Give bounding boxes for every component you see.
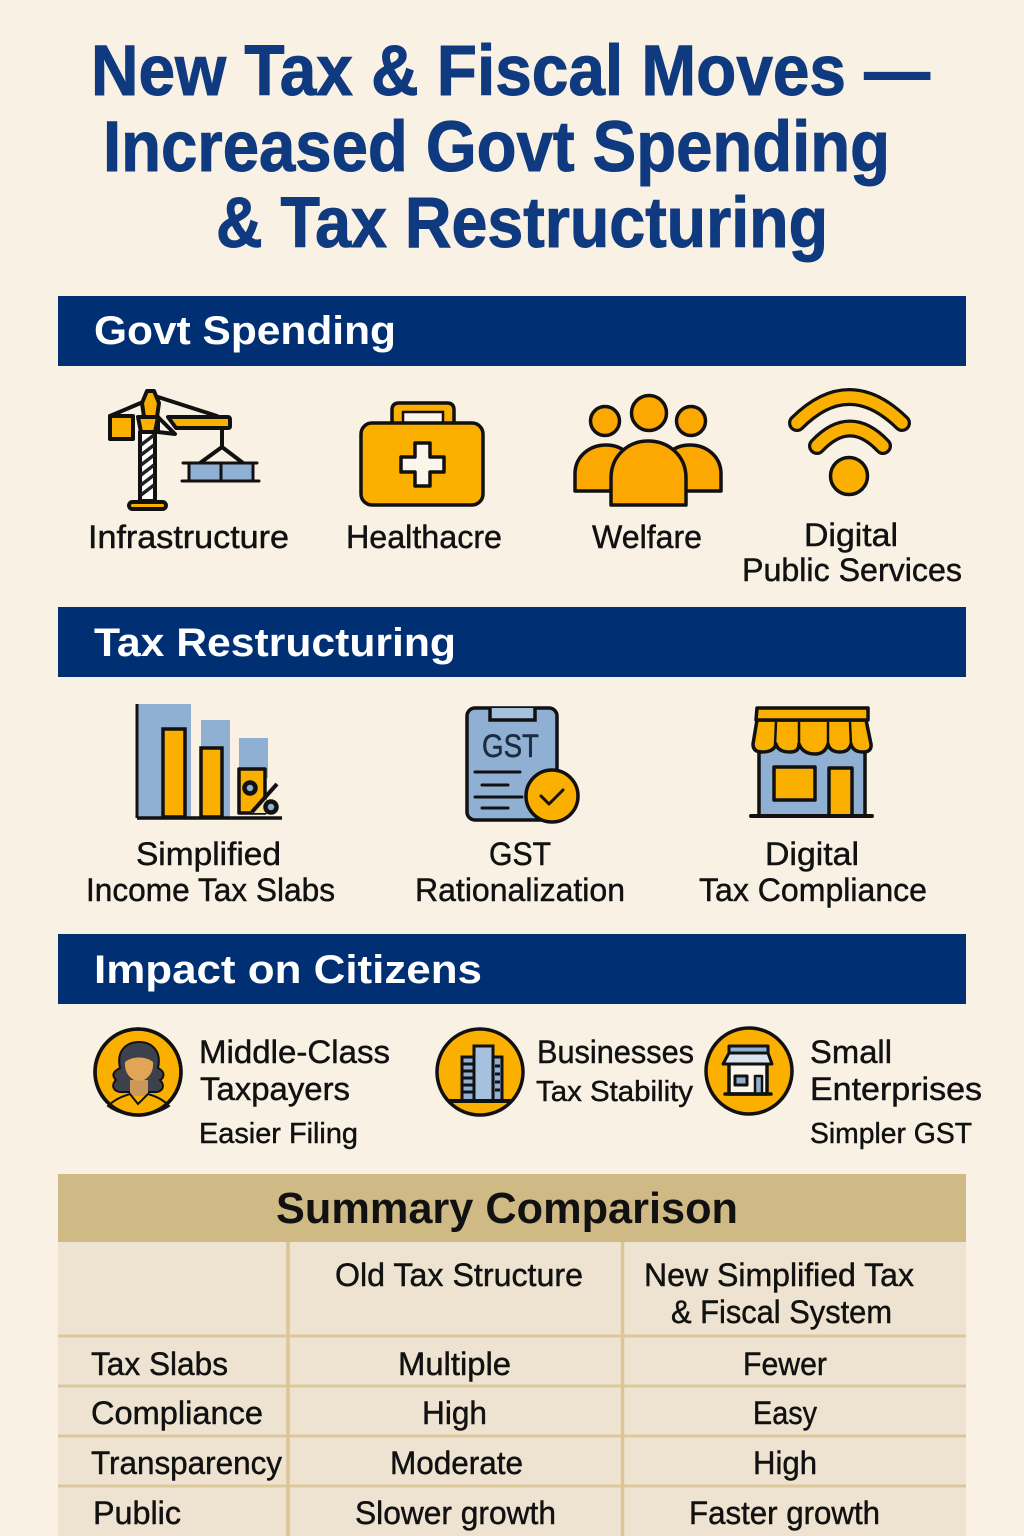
label: Small Enterprises Simpler GST bbox=[810, 1034, 982, 1150]
table header row: & Fiscal System bbox=[671, 1294, 892, 1330]
label: Businesses Tax Stability bbox=[536, 1034, 694, 1108]
table header row: New Simplified Tax bbox=[644, 1257, 914, 1293]
row: Transparency: Transparency bbox=[91, 1445, 282, 1481]
label: Small Enterprises Simpler GST: Enterprises bbox=[810, 1071, 982, 1107]
section heading: Tax Restructuring bbox=[58, 607, 966, 677]
row: Public bbox=[93, 1495, 880, 1531]
section heading: Govt Spending: Govt Spending bbox=[94, 309, 396, 353]
label: Small Enterprises Simpler GST: Small bbox=[810, 1034, 892, 1070]
section heading: Govt Spending bbox=[58, 296, 966, 366]
row: Tax Slabs: Multiple bbox=[398, 1346, 511, 1382]
row: Tax Slabs bbox=[91, 1346, 827, 1382]
row: Compliance: Compliance bbox=[91, 1395, 263, 1431]
label: Simplified Income Tax Slabs bbox=[86, 836, 335, 908]
section heading: Impact on Citizens: Impact on Citizens bbox=[94, 948, 482, 992]
label: Healthacre: Healthacre bbox=[346, 519, 502, 555]
icon: construction crane bbox=[110, 391, 259, 509]
icon: small enterprise shop bbox=[706, 1028, 792, 1114]
label: Digital Tax Compliance: Digital bbox=[765, 836, 859, 872]
label: Digital Public Services: Digital bbox=[804, 517, 898, 553]
label: GST Rationalization bbox=[415, 836, 625, 908]
label: Welfare: Welfare bbox=[592, 519, 702, 555]
label: Businesses Tax Stability: Businesses bbox=[537, 1034, 694, 1070]
row: Compliance: High bbox=[422, 1395, 487, 1431]
title: & Tax Restructuring bbox=[216, 184, 828, 263]
row: Tax Slabs: Tax Slabs bbox=[91, 1346, 228, 1382]
label: GST Rationalization: Rationalization bbox=[415, 872, 625, 908]
label: Digital Public Services: Public Services bbox=[742, 552, 962, 588]
label: Infrastructure: Infrastructure bbox=[88, 519, 289, 555]
row: Compliance: Easy bbox=[753, 1395, 817, 1431]
label: Digital Tax Compliance bbox=[699, 836, 927, 908]
icon: office building bbox=[437, 1029, 523, 1115]
label: Digital Public Services bbox=[742, 517, 962, 588]
label: GST Rationalization: GST bbox=[489, 836, 551, 872]
label: Middle-Class Taxpayers Easier Filing: Taxpayers bbox=[200, 1071, 350, 1107]
table header row bbox=[335, 1257, 914, 1330]
label: Businesses Tax Stability: Tax Stability bbox=[536, 1076, 694, 1108]
table title bbox=[58, 1174, 966, 1242]
table title: Summary Comparison bbox=[276, 1184, 738, 1233]
row: Tax Slabs: Fewer bbox=[743, 1346, 827, 1382]
icon: GST clipboard with check bbox=[467, 708, 578, 822]
icon: GST clipboard with check: GST bbox=[482, 728, 539, 764]
section heading: Tax Restructuring: Tax Restructuring bbox=[94, 621, 456, 665]
row: Public: Faster growth bbox=[689, 1495, 880, 1531]
section heading: Impact on Citizens bbox=[58, 934, 966, 1004]
icon: storefront bbox=[751, 708, 872, 816]
label: Small Enterprises Simpler GST: Simpler GST bbox=[810, 1118, 972, 1150]
icon: wifi signal bbox=[797, 397, 902, 494]
row: Transparency: Moderate bbox=[390, 1445, 523, 1481]
icon: group of people bbox=[575, 396, 721, 505]
label: Middle-Class Taxpayers Easier Filing: Easier Filing bbox=[199, 1118, 358, 1150]
row: Transparency: High bbox=[753, 1445, 817, 1481]
title: New Tax & Fiscal Moves — bbox=[91, 32, 930, 111]
row: Transparency bbox=[91, 1445, 817, 1481]
label: Simplified Income Tax Slabs: Simplified bbox=[136, 836, 281, 872]
icon: first aid briefcase bbox=[361, 403, 483, 505]
table header row: Old Tax Structure bbox=[335, 1257, 583, 1293]
label: Middle-Class Taxpayers Easier Filing bbox=[199, 1034, 390, 1150]
label: Simplified Income Tax Slabs: Income Tax Slabs bbox=[86, 872, 335, 908]
row: Compliance bbox=[91, 1395, 817, 1431]
icon: middle-class taxpayer bbox=[95, 1029, 181, 1115]
panel: summary comparison table bbox=[58, 1174, 966, 1536]
row: Public: Public bbox=[93, 1495, 181, 1531]
title bbox=[91, 32, 930, 263]
label: Middle-Class Taxpayers Easier Filing: Middle-Class bbox=[199, 1034, 390, 1070]
icon: descending bars with percent bbox=[137, 704, 282, 818]
title: Increased Govt Spending bbox=[103, 108, 890, 187]
label: Digital Tax Compliance: Tax Compliance bbox=[699, 872, 927, 908]
row: Public: Slower growth bbox=[355, 1495, 556, 1531]
